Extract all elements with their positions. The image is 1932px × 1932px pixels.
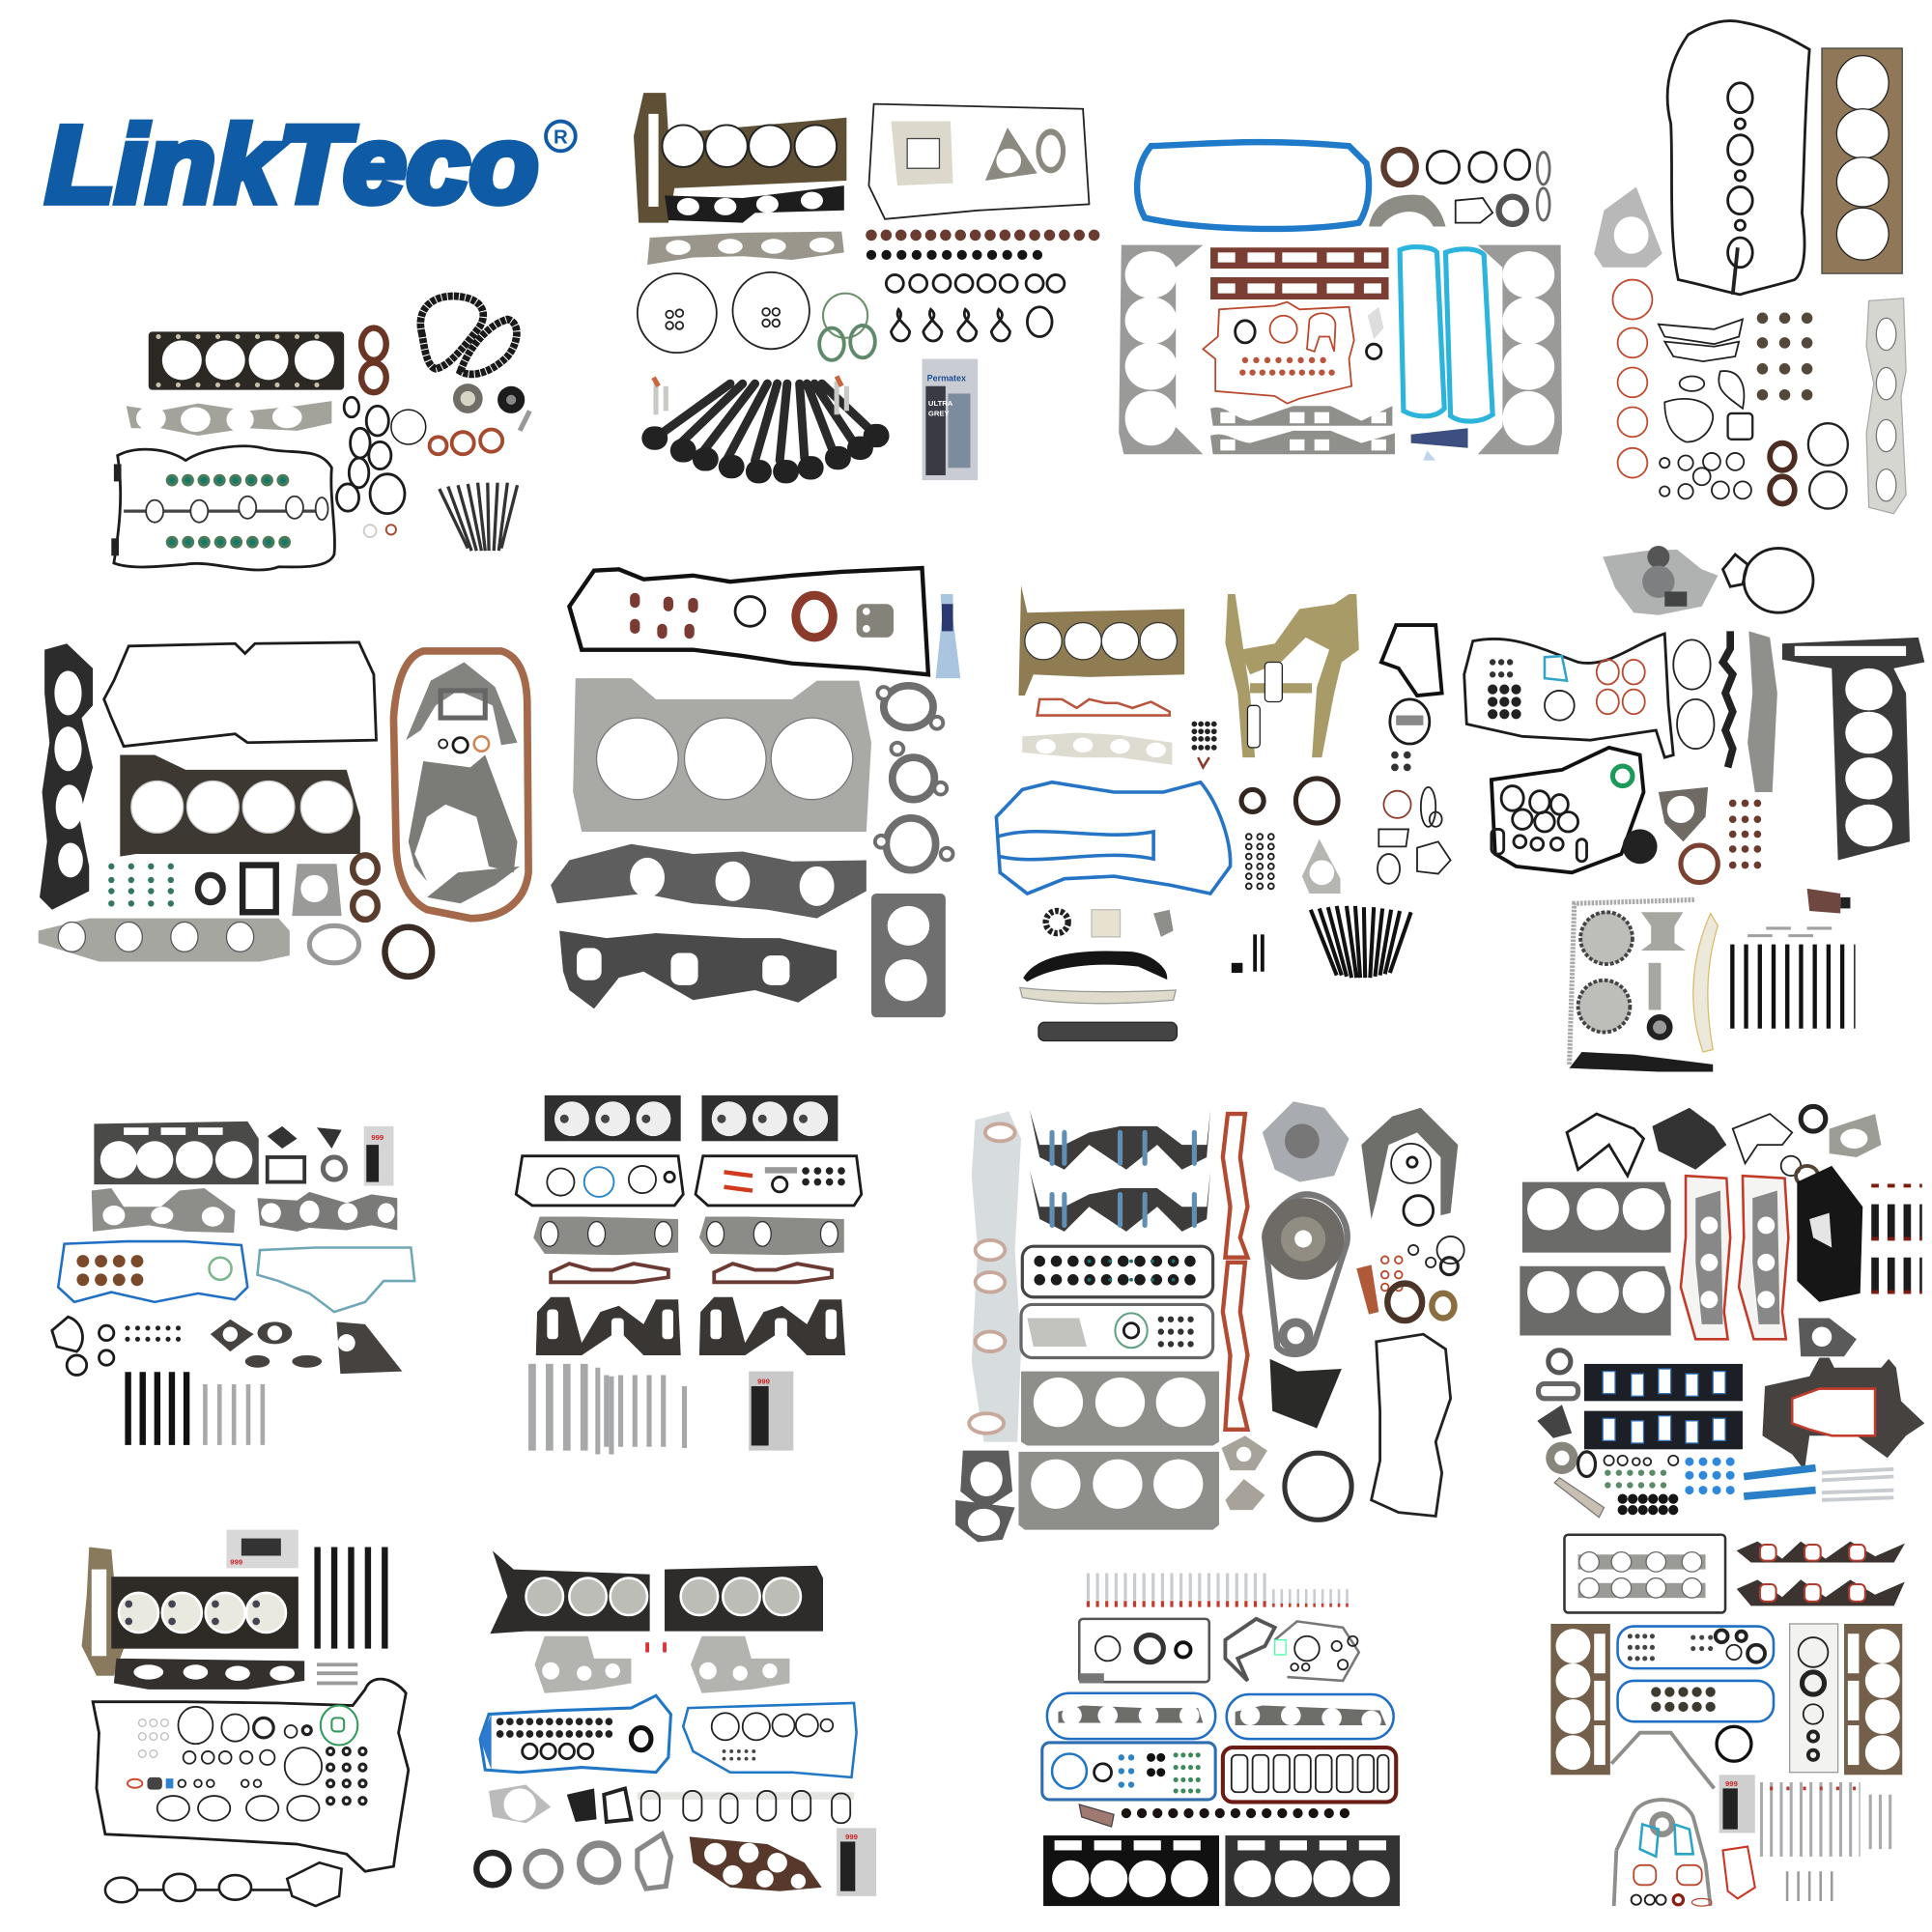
sealant package	[364, 1126, 393, 1185]
valve cover with seals	[1022, 1246, 1213, 1297]
ring and seal	[735, 595, 894, 638]
red silicone gasket	[1722, 1847, 1755, 1898]
gears and chain	[1263, 1194, 1348, 1354]
small right gaskets	[875, 686, 953, 870]
blue gaskets with exhaust	[1047, 1693, 1394, 1739]
exhaust gaskets	[1210, 406, 1395, 454]
silver shield	[969, 1112, 1021, 1442]
head gasket	[149, 331, 344, 390]
tensioner block	[1092, 910, 1174, 937]
head gasket	[82, 1548, 298, 1676]
oil pan gasket	[1079, 1619, 1209, 1683]
dark gaskets	[211, 1320, 402, 1374]
bottom gaskets	[476, 1834, 670, 1889]
sealant package	[1719, 1775, 1755, 1833]
dark red intake gasket	[1223, 1747, 1396, 1802]
red outlined exhaust gaskets	[1681, 1176, 1788, 1339]
kit 7: chain and gasket set	[996, 585, 1451, 1041]
valve stem seals	[172, 480, 287, 542]
rings in covers	[547, 1166, 841, 1197]
blue gasket left	[480, 1695, 670, 1773]
exhaust gasket	[559, 930, 837, 1009]
intake seal gasket	[105, 1862, 342, 1906]
water pump	[1603, 546, 1718, 615]
logo: LinkTeco: R	[554, 127, 568, 149]
sealant package: 999	[757, 1377, 770, 1385]
green rings	[819, 326, 875, 360]
blue gasket right	[683, 1703, 857, 1777]
oval gaskets	[1673, 639, 1715, 749]
timing cover gasket	[1225, 594, 1359, 757]
sealant tube	[1554, 1478, 1604, 1518]
valve seals	[111, 867, 172, 903]
oil pan gasket	[1564, 1535, 1725, 1612]
kit 12: V6 supercharged set	[1520, 1106, 1924, 1518]
silver shields	[533, 1216, 844, 1255]
red intake gasket	[1037, 699, 1170, 716]
cyan valve cover gaskets	[1400, 247, 1492, 421]
large o-rings	[638, 272, 867, 353]
sealant package: 999	[230, 1557, 242, 1566]
head gasket	[120, 755, 360, 857]
sealant package	[923, 359, 978, 480]
silver intake parts	[534, 1636, 789, 1693]
water pump gasket	[1381, 625, 1442, 696]
lower o-rings	[157, 1796, 320, 1821]
cam gears	[1578, 912, 1633, 1033]
small seals	[1194, 724, 1214, 767]
red rings	[364, 430, 502, 537]
right exhaust gasket	[257, 1192, 397, 1232]
silver bolts	[203, 1391, 266, 1438]
intake gaskets	[1210, 247, 1389, 299]
silver head bolts	[528, 1368, 685, 1454]
crank sprocket	[1650, 1017, 1669, 1037]
head bolts	[440, 483, 518, 551]
bolt heads	[653, 436, 877, 471]
assembly tube	[1079, 1804, 1114, 1827]
valve seals	[635, 598, 693, 634]
right head gasket	[1478, 245, 1562, 454]
valve cover gasket	[1667, 21, 1809, 295]
green ring	[321, 1706, 357, 1746]
seals and rings	[1369, 150, 1549, 226]
small left gaskets	[1537, 1350, 1596, 1477]
rings and seals	[1660, 423, 1848, 509]
throttle gaskets	[955, 1451, 1015, 1542]
timing cover gasket	[1361, 1108, 1458, 1225]
intake gasket	[665, 185, 844, 223]
bolts	[1871, 1185, 1922, 1293]
blue valve cover gasket two	[1618, 1681, 1774, 1721]
kit 14: V6 DOHC set	[476, 1550, 876, 1896]
front cover gaskets	[1611, 1733, 1715, 1906]
throttle gasket	[1799, 1319, 1857, 1356]
kit 13: inline four with long cover	[82, 1530, 409, 1906]
silver exhaust strip	[1747, 631, 1777, 792]
black plate	[1623, 829, 1658, 864]
front cover gasket	[1492, 748, 1643, 872]
black intake gasket	[40, 643, 93, 910]
black head bolts	[125, 1380, 192, 1437]
timing covers	[406, 662, 520, 903]
kit 11: V6 timing and gasket set	[955, 1101, 1464, 1542]
sealant package	[749, 1372, 793, 1451]
curved white guide	[1693, 914, 1718, 1052]
blue coolant gaskets	[1640, 1825, 1693, 1857]
head gaskets	[1018, 1372, 1219, 1530]
crank seals	[1356, 1264, 1454, 1321]
seal rings	[1381, 1236, 1464, 1291]
large ring	[1285, 1453, 1351, 1520]
kit 8: timing and water pump set	[1464, 546, 1924, 1072]
seal grid	[330, 1751, 379, 1801]
sealant package: GREY	[928, 409, 950, 417]
exhaust mesh gasket	[1302, 839, 1341, 894]
head gasket	[573, 678, 871, 832]
sealant package: 999	[1725, 1779, 1738, 1788]
head bolts top row	[1087, 1587, 1354, 1605]
small gaskets	[336, 397, 426, 514]
small parts	[128, 1777, 261, 1790]
exhaust manifold	[1866, 298, 1906, 514]
valve seals grid	[1733, 804, 1770, 866]
intake gaskets	[1030, 1110, 1210, 1232]
assorted oil gaskets	[1378, 787, 1451, 884]
middle row gaskets	[489, 1785, 854, 1823]
rear valve cover	[1372, 1334, 1451, 1517]
black bracket	[1270, 1359, 1342, 1429]
dark intake gaskets	[536, 1297, 845, 1355]
red strip gaskets	[1223, 1114, 1247, 1430]
valley gaskets	[1222, 1435, 1267, 1510]
kit 1: timing belt head set	[111, 297, 529, 570]
sealant package: ULTRA	[928, 399, 953, 408]
head gasket	[94, 1122, 259, 1184]
silver exhaust gasket	[1022, 732, 1172, 765]
sealant package: 999	[371, 1133, 384, 1142]
center silver gasket	[1790, 1624, 1838, 1773]
blue oil pan gasket	[1137, 142, 1369, 229]
gasket panel with rings	[1042, 1743, 1215, 1800]
blue valve cover gasket one	[1618, 1627, 1774, 1668]
pulleys	[453, 384, 529, 431]
kit 2: head set with bolts	[634, 93, 1104, 480]
guide and tensioner	[1641, 912, 1686, 1009]
small bolts	[1232, 934, 1263, 972]
head gaskets	[545, 1095, 838, 1141]
small gaskets	[268, 1126, 345, 1182]
head gaskets	[490, 1550, 823, 1634]
blue and silver tubes	[1744, 1468, 1893, 1500]
red intake seals	[551, 1264, 832, 1282]
blue caps	[1690, 1462, 1731, 1491]
right head gasket	[1844, 1624, 1902, 1775]
timing cover set	[1225, 1619, 1359, 1681]
water pump	[1263, 1101, 1350, 1182]
kit 5: suzuki style set	[39, 642, 528, 977]
valve cover gasket	[111, 446, 334, 570]
blue black intake gaskets	[1584, 1364, 1743, 1449]
timing belt	[420, 297, 517, 374]
small bolts	[1747, 928, 1832, 936]
kit 16: V8 LS full set	[1550, 1535, 1904, 1906]
exhaust manifold gasket	[127, 401, 331, 436]
crank seal	[1681, 845, 1718, 883]
left head gasket	[1550, 1624, 1610, 1775]
silver bolts	[317, 1664, 357, 1683]
round gasket and seal	[309, 925, 432, 977]
head gasket	[1782, 638, 1924, 860]
timing chain	[1038, 1022, 1177, 1041]
red rings	[1612, 280, 1652, 478]
kit 9: head set with bolts	[52, 1122, 414, 1414]
small bolts	[1786, 1875, 1840, 1898]
brown pan gasket	[393, 651, 528, 919]
small o-rings	[138, 1707, 322, 1785]
kit 3: V8 full set	[1119, 142, 1562, 461]
second valve cover	[1021, 1304, 1213, 1358]
white chain guide	[1020, 987, 1176, 1004]
seals	[1241, 779, 1338, 823]
black rubber parts	[1623, 1499, 1683, 1510]
light blue gasket	[257, 1247, 414, 1312]
exhaust gasket	[39, 919, 290, 962]
logo: LinkTeco: LinkTeco	[45, 103, 538, 225]
exhaust gasket	[114, 1659, 304, 1690]
bolt fan	[659, 384, 874, 461]
valve cover gasket	[93, 1679, 409, 1871]
head bolts	[314, 1558, 390, 1637]
exhaust gasket	[647, 232, 844, 265]
sealant tube	[936, 594, 960, 678]
small bottom seals	[1632, 1865, 1712, 1906]
sealant package: 999	[845, 1833, 858, 1841]
oil cooler gaskets	[1659, 320, 1752, 442]
valve cover gasket	[868, 104, 1089, 219]
kit 10: V6 head set	[516, 1095, 862, 1454]
o-ring grid	[1249, 837, 1282, 886]
valve cover gasket	[104, 642, 376, 747]
o-ring rows	[886, 274, 1065, 341]
blue valve cover gasket	[996, 782, 1231, 894]
small o-rings	[439, 736, 489, 753]
timing chain	[1570, 899, 1695, 1065]
red pins	[647, 1642, 665, 1652]
ring set	[1390, 699, 1430, 767]
kit 6: three cylinder set	[551, 568, 960, 1017]
head bolts	[1730, 953, 1856, 1019]
small rings	[52, 1317, 114, 1375]
triangular gasket	[1659, 787, 1708, 841]
chain gasket strip	[1722, 631, 1733, 767]
timing gaskets top	[1567, 1106, 1881, 1185]
head gaskets	[1520, 1182, 1671, 1335]
crank seals	[361, 328, 386, 392]
kit 4: inline four set	[1594, 21, 1906, 514]
intake gasket	[551, 844, 867, 919]
assembly tube	[1807, 889, 1850, 914]
blue valve cover gasket with seals	[58, 1241, 247, 1302]
mesh exhaust gasket	[1594, 186, 1662, 268]
valve cover gasket	[569, 568, 928, 674]
valve cover gasket	[1464, 634, 1673, 757]
seal row	[1126, 1809, 1360, 1817]
plastic retainers	[653, 376, 846, 414]
round seal	[1717, 1726, 1751, 1761]
head gasket	[1822, 48, 1902, 273]
head bolts fan	[1311, 906, 1411, 978]
pump o-rings	[1722, 549, 1813, 612]
sealant package	[837, 1828, 876, 1896]
valve cover gaskets	[516, 1156, 862, 1206]
head gasket	[634, 93, 846, 223]
kit 15: V8 LS set	[1042, 1587, 1400, 1906]
sealant package	[226, 1530, 298, 1568]
black rail	[1570, 1052, 1713, 1072]
seals and plates	[198, 855, 378, 920]
head gasket	[1018, 585, 1184, 696]
rings inside cover	[1492, 656, 1645, 721]
brown intake gasket	[690, 1836, 822, 1891]
ring grid	[128, 1328, 178, 1339]
left head gasket	[1119, 245, 1203, 454]
sealant tube	[1411, 428, 1468, 461]
small rings rows	[1604, 1456, 1678, 1485]
black oil pan	[1797, 1166, 1862, 1302]
red front cover outline	[1203, 302, 1383, 404]
sprocket	[1046, 911, 1068, 933]
sealant package: Permatex	[927, 374, 966, 384]
red intake gaskets	[1738, 1542, 1904, 1605]
valve seals	[1762, 318, 1830, 395]
black chain guide	[1025, 952, 1166, 980]
supercharger plate	[1762, 1358, 1924, 1470]
valve seal rows	[871, 235, 1104, 255]
throttle plate gasket	[871, 894, 946, 1017]
left exhaust shield	[92, 1188, 235, 1233]
head gaskets	[1043, 1835, 1400, 1906]
head bolts	[1760, 1788, 1896, 1822]
